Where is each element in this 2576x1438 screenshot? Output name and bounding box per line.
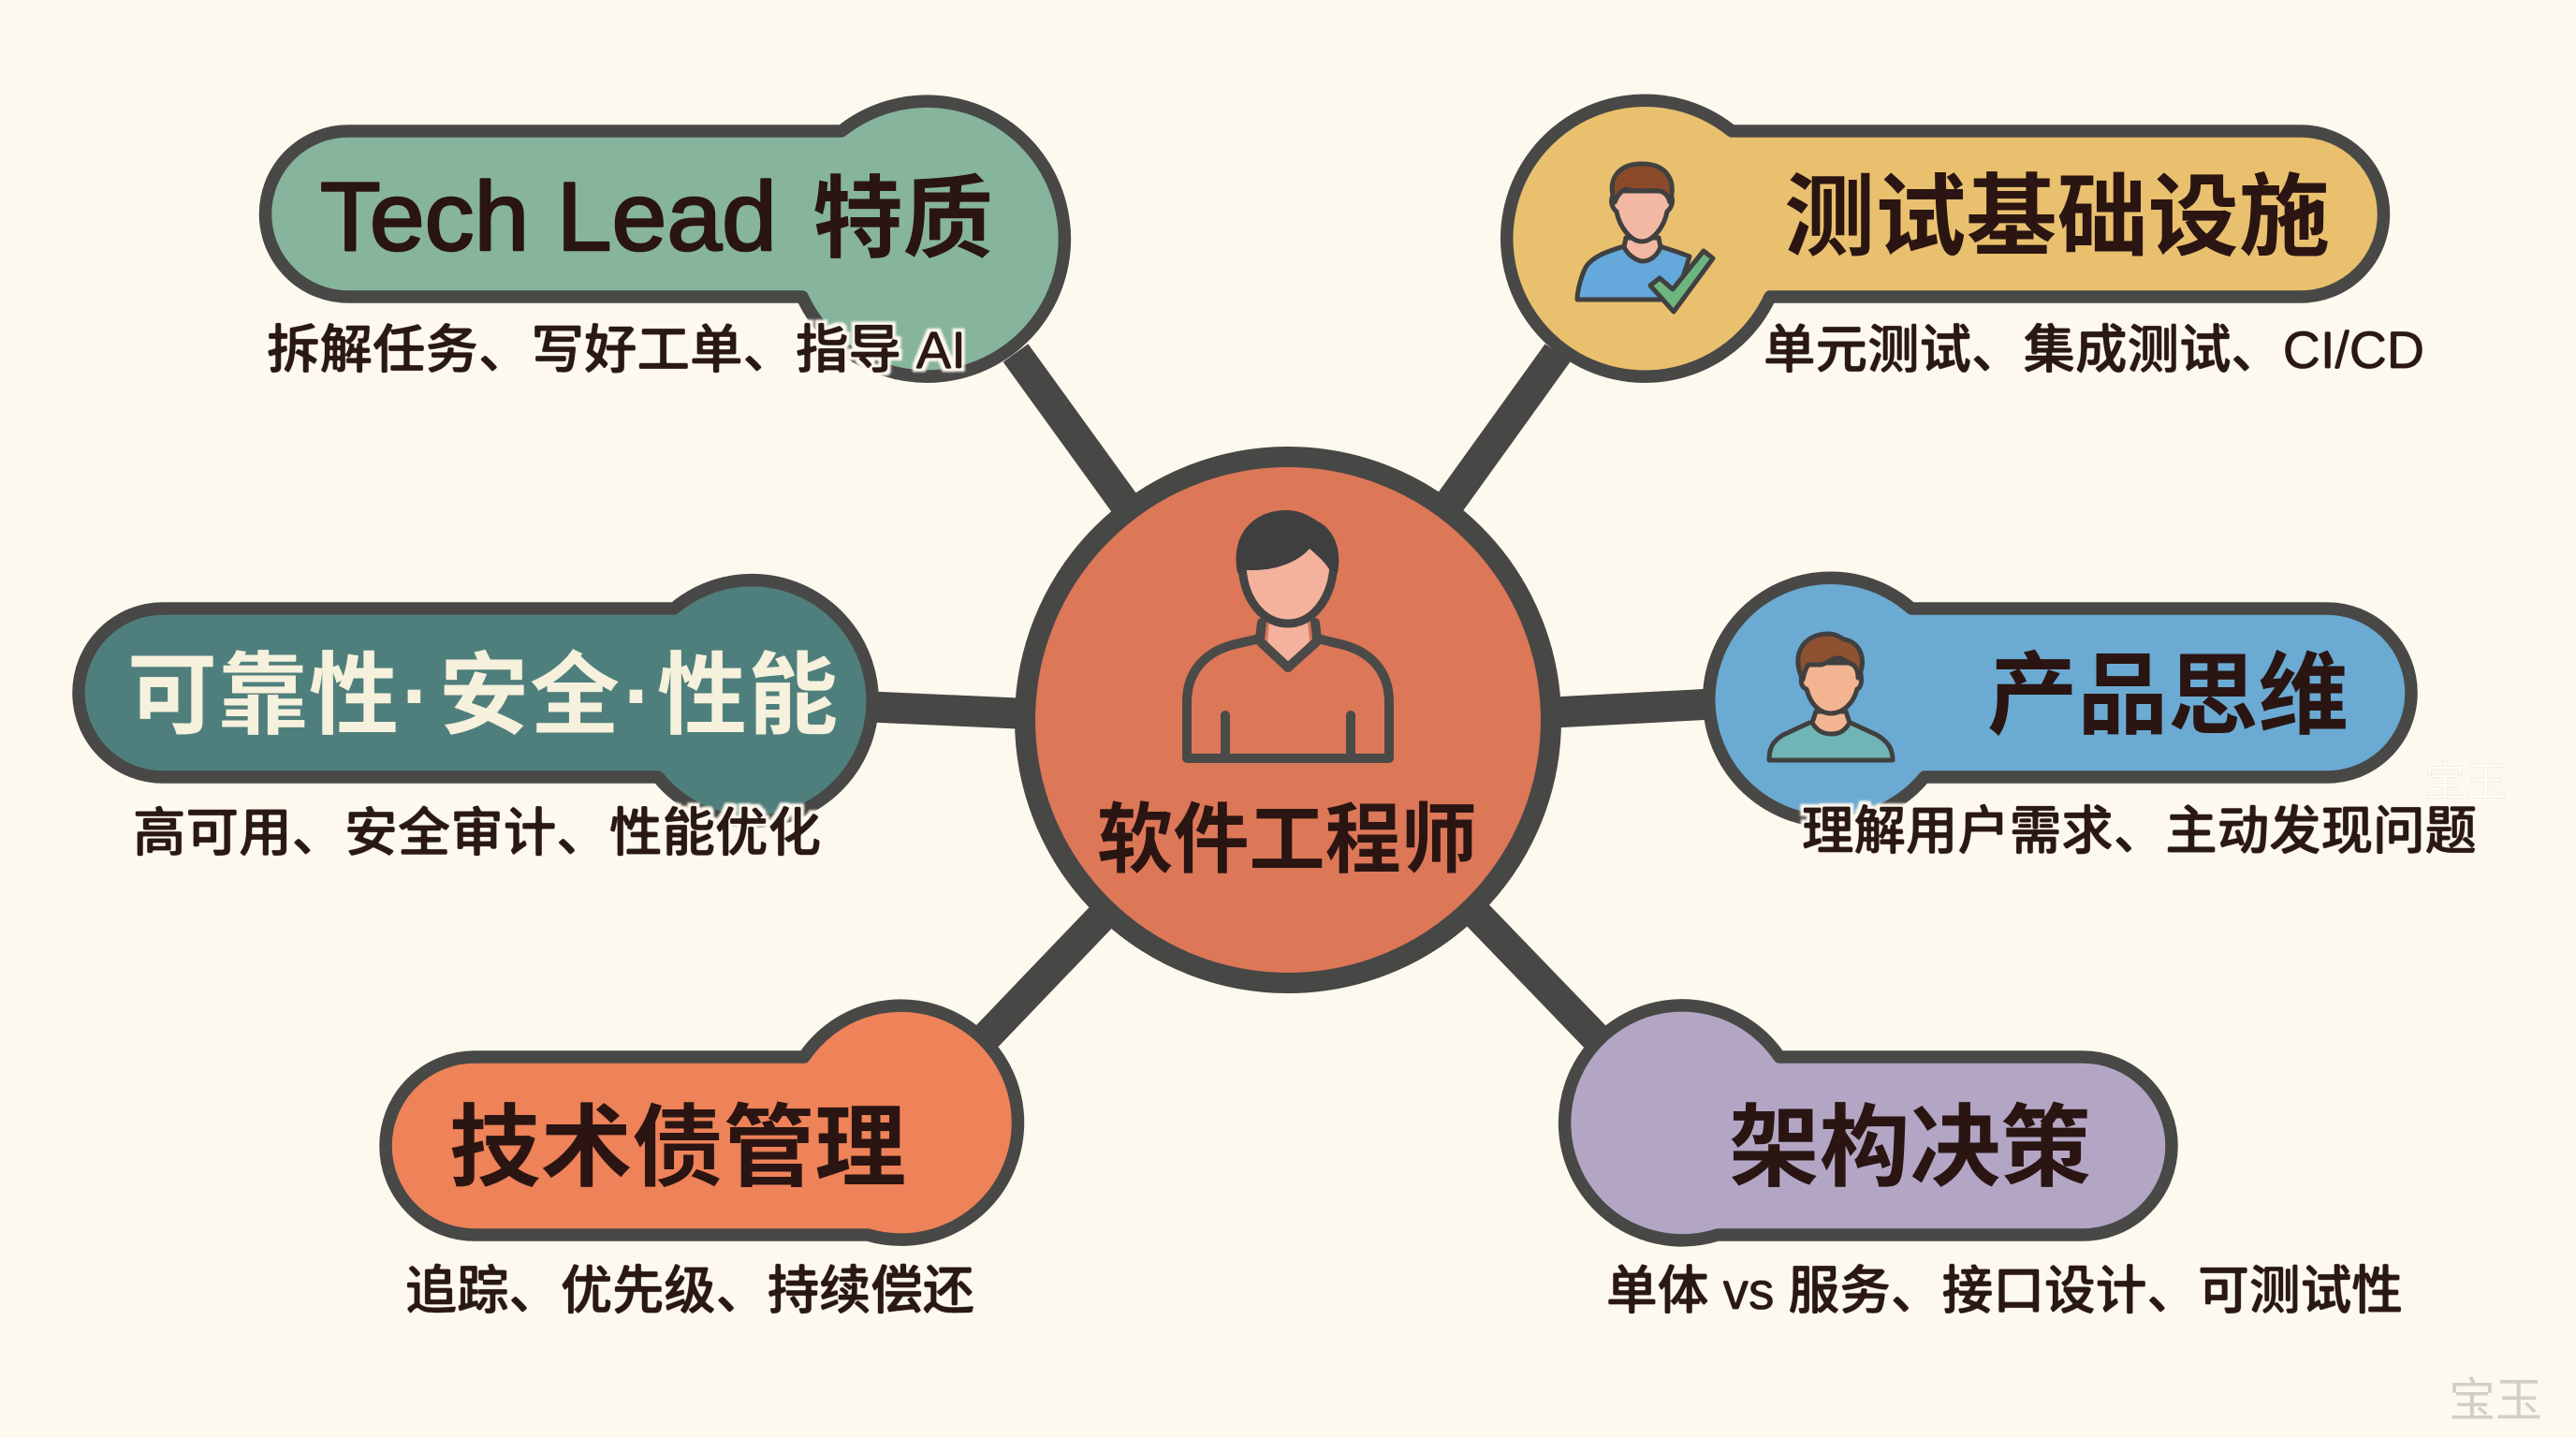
icon: person with check	[1577, 164, 1713, 312]
panel: testing infrastructure	[1507, 100, 2424, 379]
connector: tech debt	[973, 894, 1123, 1050]
bubble	[1709, 578, 2411, 821]
connector: product	[1535, 704, 1713, 713]
panel: architecture decisions	[1565, 1005, 2403, 1320]
description: 单体 vs 服务、接口设计、可测试性	[1606, 1261, 2403, 1320]
panel: reliability security performance	[79, 580, 872, 862]
bubble	[1507, 100, 2383, 376]
panel: tech debt	[386, 1005, 1017, 1320]
connector: Tech Lead	[1016, 353, 1170, 566]
connectors	[871, 353, 1713, 1052]
description: 追踪、优先级、持续偿还	[405, 1261, 974, 1320]
heading: Tech Lead	[320, 163, 777, 271]
center circle	[1025, 457, 1551, 983]
panel: center node	[1025, 457, 1551, 983]
description: 拆解任务、写好工单、指导 AI	[267, 320, 966, 379]
description: 理解用户需求、主动发现问题	[1802, 801, 2477, 860]
watermark: mid right: 宝玉	[2424, 759, 2507, 805]
panel: product thinking	[1709, 578, 2477, 860]
connector: architecture	[1456, 892, 1610, 1052]
watermark: bottom right: 宝玉	[2449, 1374, 2542, 1427]
bubble	[265, 101, 1064, 376]
connector: reliability	[871, 707, 1039, 714]
heading	[320, 163, 993, 271]
heading: 产品思维	[1987, 646, 2349, 746]
bubble	[79, 580, 872, 822]
connector: testing	[1404, 353, 1558, 566]
description: 单元测试、集成测试、CI/CD	[1764, 320, 2424, 379]
bubble	[386, 1005, 1017, 1240]
heading: 技术债管理	[449, 1098, 906, 1198]
panel: Tech Lead	[265, 101, 1064, 379]
icon: engineer	[1187, 510, 1389, 758]
bubble	[1565, 1005, 2172, 1240]
heading: 架构决策	[1729, 1098, 2091, 1198]
heading: 可靠性·安全·性能	[127, 646, 838, 746]
icon: person	[1769, 634, 1893, 760]
center label: 软件工程师	[1097, 798, 1477, 883]
heading: 测试基础设施	[1784, 168, 2330, 268]
description: 高可用、安全审计、性能优化	[133, 803, 821, 862]
heading: 特质	[812, 169, 993, 270]
